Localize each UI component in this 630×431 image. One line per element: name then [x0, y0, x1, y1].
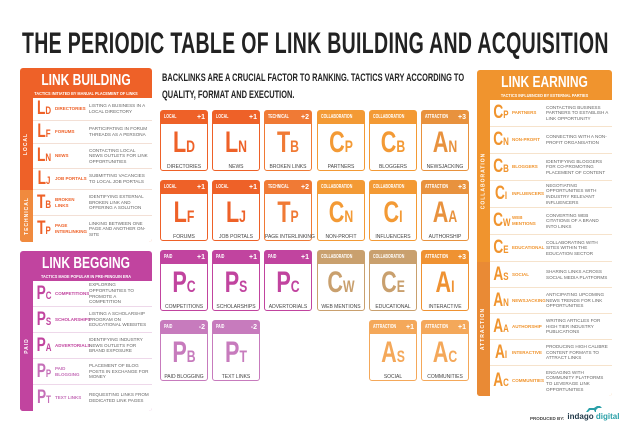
tile: Ci	[369, 180, 417, 241]
tile: Cp: PARTNERS	[328, 164, 354, 170]
tile: Pb: PAID	[164, 324, 172, 330]
row: partners: PARTNERS	[512, 110, 536, 115]
tile: Ps: PS	[225, 266, 247, 299]
tile: Tp	[264, 180, 312, 241]
row: paid blogging	[33, 359, 152, 385]
row: interactive: INTERACTIVE	[512, 350, 542, 354]
tile: Ac: COMMUNITIES	[427, 374, 463, 380]
row: influencers: INFLUENCERS	[512, 191, 544, 196]
heading: link earning: LINK EARNING	[501, 74, 588, 91]
row: broken links: BROKEN LINKS	[55, 196, 75, 208]
strip: paid: PAID	[24, 338, 30, 354]
heading: link begging: TACTICS MADE POPULAR IN PRE-PENGUIN ERA	[41, 274, 131, 279]
strip: attraction: ATTRACTION	[480, 308, 486, 350]
tile: Pc competitions: PC	[172, 266, 196, 299]
tile: Tb: +2	[301, 114, 309, 121]
row: authorship	[490, 314, 612, 340]
row: educational: COLLABORATING WITH SITES WITHIN THE EDUCATION SECTOR	[546, 240, 598, 256]
credit: produced by indago digital	[530, 406, 619, 421]
row: non-profit: CONNECTING WITH A NON-PROFIT ORGANISATION	[546, 134, 607, 145]
subtitle text: QUALITY, FORMAT AND EXECUTION.	[162, 89, 294, 101]
row: non-profit: NON-PROFIT	[512, 137, 540, 142]
tile: Ld: DIRECTORIES	[167, 164, 201, 170]
tile: An: AN	[433, 126, 457, 159]
tile: Ac: ATTRACTION	[425, 324, 448, 330]
row: paid blogging: PAID BLOGGING	[55, 366, 80, 376]
row: bloggers	[490, 154, 612, 181]
panel: link earning	[477, 70, 612, 396]
row: social: SOCIAL	[512, 272, 529, 276]
tile: Ci: CI	[383, 196, 403, 229]
row: web mentions: CONVERTING WEB CITATIONS OF A BRAND INTO LINKS	[546, 213, 599, 229]
tile: An	[421, 110, 469, 171]
row: web mentions	[490, 208, 612, 235]
tile: Cw: COLLABORATION	[321, 254, 352, 260]
logo: indago digital	[567, 406, 619, 421]
row: directories: LISTING A BUSINESS IN A LOCAL DIRECTORY	[89, 103, 145, 114]
tile: Ld: LOCAL	[164, 114, 176, 120]
row: forums: PARTICIPATING IN FORUM THREADS AS A PERSONA	[89, 126, 147, 137]
row: competitions: EXPLORING OPPORTUNITIES TO PROMOTE A COMPETITION	[89, 282, 134, 304]
tile: An: NEWSJACKING	[427, 164, 463, 170]
row: newsjacking	[490, 288, 612, 314]
tile: Cn: CN	[329, 196, 353, 229]
tile: Lf	[160, 180, 208, 241]
tile: Ai: ATTRACTION	[425, 254, 448, 260]
row: educational: CE	[493, 237, 509, 258]
tile: Cb: BLOGGERS	[379, 164, 407, 170]
row: bloggers: IDENTIFYING BLOGGERS FOR CO-PROMOTING PLACEMENT OF CONTENT	[546, 159, 605, 175]
row: influencers	[490, 181, 612, 208]
row: partners: CONTACTING BUSINESS PARTNERS TO ESTABLISH A LINK OPPORTUNITY	[546, 105, 608, 121]
row: social	[490, 262, 612, 288]
tile: Lf: LF	[174, 196, 194, 229]
row: scholarships: PS	[37, 308, 51, 330]
row: competitions: COMPETITIONS	[55, 290, 89, 296]
tile: Tb: TECHNICAL	[268, 114, 289, 120]
tile: Ac: AC	[433, 336, 457, 369]
tile: As: ATTRACTION	[373, 324, 396, 330]
tile: Ce: EDUCATIONAL	[375, 304, 411, 310]
tile: Ps: PAID	[216, 254, 224, 260]
row: forums: LF	[37, 121, 51, 142]
tile: Ln: NEWS	[228, 164, 244, 170]
tile: Cb: CB	[381, 126, 405, 159]
row: newsjacking: NEWSJACKING	[512, 298, 546, 302]
row: page interlinking	[33, 216, 152, 242]
row: news	[33, 144, 152, 169]
row: directories: DIRECTORIES	[55, 106, 86, 111]
strip: collaboration: COLLABORATION	[481, 153, 487, 209]
tile: Lj: LJ	[226, 196, 246, 229]
row: social: SHARING LINKS ACROSS SOCIAL MEDIA PLATFORMS	[546, 269, 607, 280]
row: communities	[490, 366, 612, 396]
tile: Pb: PAID BLOGGING	[164, 374, 204, 380]
row: web mentions: CW	[493, 210, 510, 231]
tile: Pc advertorials: PC	[276, 266, 300, 299]
strip: technical: TECHNICAL	[24, 197, 30, 235]
tile: Tp: TECHNICAL	[268, 184, 289, 190]
row: job portals	[33, 169, 152, 190]
row: interactive: PRODUCING HIGH CALIBRE CONTENT FORMATS TO ATTRACT LINKS	[546, 344, 608, 360]
row: forums: FORUMS	[55, 129, 74, 134]
tile: Ci: INFLUENCERS	[375, 234, 411, 240]
tile: Ld: +1	[197, 114, 205, 121]
tile: Tp: +2	[301, 184, 309, 191]
row: directories	[33, 98, 152, 121]
row: page interlinking: PAGE INTERLINKING	[55, 223, 87, 234]
row: forums	[33, 121, 152, 144]
tile: Lj	[212, 180, 260, 241]
tile: An: +3	[458, 114, 466, 121]
strip: local: LOCAL	[24, 133, 30, 155]
heading: link building	[34, 72, 138, 96]
tile: Ac: +1	[458, 324, 466, 331]
tile: Pb	[160, 320, 208, 381]
tile: Ps: SCHOLARSHIPS	[216, 304, 256, 310]
tile: Aa: AUTHORSHIP	[429, 234, 461, 240]
tile: Ln	[212, 110, 260, 171]
row: job portals: SUBMITTING VACANCIES TO LOCAL JOB PORTALS	[89, 173, 145, 184]
strip: local	[20, 98, 33, 190]
row: educational: EDUCATIONAL	[512, 245, 544, 250]
row: broken links: TB	[37, 192, 51, 212]
tile: Aa	[421, 180, 469, 241]
row: partners: CP	[493, 102, 509, 123]
row: advertorials: ADVERTORIALS	[55, 342, 90, 348]
tile: Aa: +3	[458, 184, 466, 191]
row: bloggers: BLOGGERS	[512, 164, 538, 169]
row: directories: LD	[37, 98, 51, 119]
tile: Tp: TP	[277, 196, 299, 229]
row: broken links	[33, 190, 152, 216]
subtitle text: BACKLINKS ARE A CRUCIAL FACTOR TO RANKING. TACTICS VARY ACCORDING TO	[162, 72, 464, 84]
tile: Cb	[369, 110, 417, 171]
tile: Ln: +1	[249, 114, 257, 121]
heading: link building: TACTICS INITIATED BY MANUAL PLACEMENT OF LINKS	[34, 91, 138, 96]
tile: Pb: -2	[199, 324, 205, 331]
credit: produced by indago digital: PRODUCED BY:	[530, 416, 564, 421]
row: social: AS	[493, 264, 509, 284]
tile: Ai: +3	[458, 254, 466, 261]
row: influencers: NEGOTIATING OPPORTUNITIES WITH INDUSTRY RELEVANT INFLUENCERS	[546, 183, 596, 205]
row: web mentions: WEB MENTIONS	[512, 215, 536, 226]
tile: Cp	[317, 110, 365, 171]
tile: An: ATTRACTION	[425, 114, 448, 120]
tile: Cw: WEB MENTIONS	[321, 304, 361, 310]
row: text links	[33, 385, 152, 411]
row: newsjacking: AN	[493, 290, 509, 310]
tile: Cw: CW	[327, 266, 355, 299]
row: page interlinking: LINKING BETWEEN ONE PAGE AND ANOTHER ON-SITE	[89, 221, 145, 237]
tile: Pc advertorials	[264, 250, 312, 311]
tile: Ld	[160, 110, 208, 171]
heading: link begging: LINK BEGGING	[42, 255, 130, 272]
strip: paid	[20, 281, 33, 411]
tile: Pc competitions: +1	[197, 254, 205, 261]
heading: link building: LINK BUILDING	[41, 72, 131, 89]
tile: Lj: LOCAL	[216, 184, 228, 190]
tile: Pt: PT	[225, 336, 247, 369]
row: authorship: WRITING ARTICLES FOR HIGH TIER INDUSTRY PUBLICATIONS	[546, 318, 600, 334]
tile: Aa: ATTRACTION	[425, 184, 448, 190]
tile: As: AS	[381, 336, 405, 369]
tile: As: +1	[406, 324, 414, 331]
row: advertorials: IDENTIFYING INDUSTRY NEWS OUTLETS FOR BRAND EXPOSURE	[89, 337, 143, 353]
subtitle text	[162, 72, 464, 101]
tile: Lj: +1	[249, 184, 257, 191]
tile: Ln: LN	[225, 126, 247, 159]
row: news: CONTACTING LOCAL NEWS OUTLETS FOR LINK OPPORTUNITIES	[89, 148, 148, 164]
tile: Pb: PB	[172, 336, 196, 369]
tile: Ac	[421, 320, 469, 381]
tile: Pc competitions: COMPETITIONS	[165, 304, 203, 310]
tile: Cp: CP	[329, 126, 353, 159]
tile: Pt: TEXT LINKS	[222, 374, 250, 380]
row: influencers: CI	[495, 183, 507, 204]
row: paid blogging: PLACEMENT OF BLOG POSTS IN EXCHANGE FOR MONEY	[89, 363, 148, 379]
panel: link begging	[20, 251, 152, 411]
tile: Lf: +1	[197, 184, 205, 191]
heading: link begging	[41, 255, 131, 279]
tile: Pc advertorials: ADVERTORIALS	[269, 304, 307, 310]
tile grid	[160, 110, 469, 381]
row: non-profit: CN	[493, 129, 509, 150]
row: interactive	[490, 340, 612, 366]
tile: Ai: AI	[435, 266, 455, 299]
tile: Aa: AA	[433, 196, 457, 229]
tile: Pt: -2	[251, 324, 257, 331]
row: educational	[490, 235, 612, 262]
row: broken links: IDENTIFYING EXTERNAL BROKEN LINK AND OFFERING A SOLUTION	[89, 194, 143, 210]
tile: Pc competitions	[160, 250, 208, 311]
title: THE PERIODIC TABLE OF LINK BUILDING AND ACQUISITION	[22, 27, 609, 60]
row: competitions: PC	[37, 282, 51, 304]
row: text links: TEXT LINKS	[55, 395, 81, 400]
row: news: NEWS	[55, 153, 68, 158]
row: page interlinking: TP	[37, 218, 51, 239]
row: non-profit	[490, 127, 612, 154]
strip: attraction	[477, 262, 490, 396]
tile: Ce: CE	[381, 266, 405, 299]
tile: Pc advertorials: PAID	[268, 254, 276, 260]
tile: Tb	[264, 110, 312, 171]
tile: Cn: NON-PROFIT	[325, 234, 357, 240]
row: scholarships	[33, 307, 152, 333]
tile: Tb: BROKEN LINKS	[270, 164, 306, 170]
tile: Tb: TB	[277, 126, 299, 159]
tile: Ld: LD	[173, 126, 195, 159]
row: interactive: AI	[495, 342, 507, 362]
row: paid blogging: PP	[37, 360, 51, 382]
tile: Ci: COLLABORATION	[373, 184, 404, 190]
tile: Ai	[421, 250, 469, 311]
tile: Ai: INTERACTIVE	[428, 304, 462, 310]
row: job portals: JOB PORTALS	[55, 176, 87, 181]
row: advertorials	[33, 333, 152, 359]
tile: Ce	[369, 250, 417, 311]
row: competitions	[33, 281, 152, 307]
row: text links: REQUESTING LINKS FROM DEDICATED LINK PAGES	[89, 392, 149, 403]
tile: Cb: COLLABORATION	[373, 114, 404, 120]
row: newsjacking: ANTICIPATING UPCOMING NEWS TRENDS FOR LINK OPPORTUNITIES	[546, 292, 604, 308]
row: scholarships: SCHOLARSHIPS	[55, 316, 91, 322]
tile: Pt	[212, 320, 260, 381]
tile: As: SOCIAL	[384, 374, 402, 380]
row: news: LN	[37, 145, 51, 166]
tile: Cp: COLLABORATION	[321, 114, 352, 120]
tile: Lf: LOCAL	[164, 184, 176, 190]
row: authorship: AUTHORSHIP	[512, 324, 542, 328]
row: communities: ENGAGING WITH COMMUNITY PLATFORMS TO LEVERAGE LINK OPPORTUNITIES	[546, 370, 603, 392]
row: scholarships: LISTING A SCHOLARSHIP PROGRAM ON EDUCATIONAL WEBSITES	[89, 311, 146, 327]
tile: Cw	[317, 250, 365, 311]
row: communities: AC	[493, 370, 509, 391]
tile: Pc competitions: PAID	[164, 254, 172, 260]
tile: Ps	[212, 250, 260, 311]
tile: As	[369, 320, 417, 381]
strip: technical	[20, 190, 33, 242]
row: advertorials: PA	[37, 334, 51, 356]
tile: Ce: COLLABORATION	[373, 254, 404, 260]
tile: Ln: LOCAL	[216, 114, 228, 120]
tile: Cn	[317, 180, 365, 241]
tile: Lj: JOB PORTALS	[219, 234, 253, 240]
tile: Cn: COLLABORATION	[321, 184, 352, 190]
tile: Pt: PAID	[216, 324, 224, 330]
tile: Ps: +1	[249, 254, 257, 261]
tile: Lf: FORUMS	[173, 234, 195, 240]
row: bloggers: CB	[493, 156, 509, 177]
row: text links: PT	[37, 387, 51, 408]
heading: link earning: TACTICS INFLUENCED BY EXTERNAL PARTIES	[501, 93, 588, 98]
row: job portals: LJ	[38, 168, 50, 189]
row: communities: COMMUNITIES	[512, 378, 544, 383]
row: authorship: AA	[493, 316, 509, 336]
tile: Pc advertorials: +1	[301, 254, 309, 261]
panel: link building	[20, 68, 152, 242]
row: partners	[490, 100, 612, 127]
strip: collaboration	[477, 100, 490, 262]
logo: indago digital: indago digital	[567, 412, 619, 421]
tile: Tp: PAGE INTERLINKING	[265, 234, 315, 240]
